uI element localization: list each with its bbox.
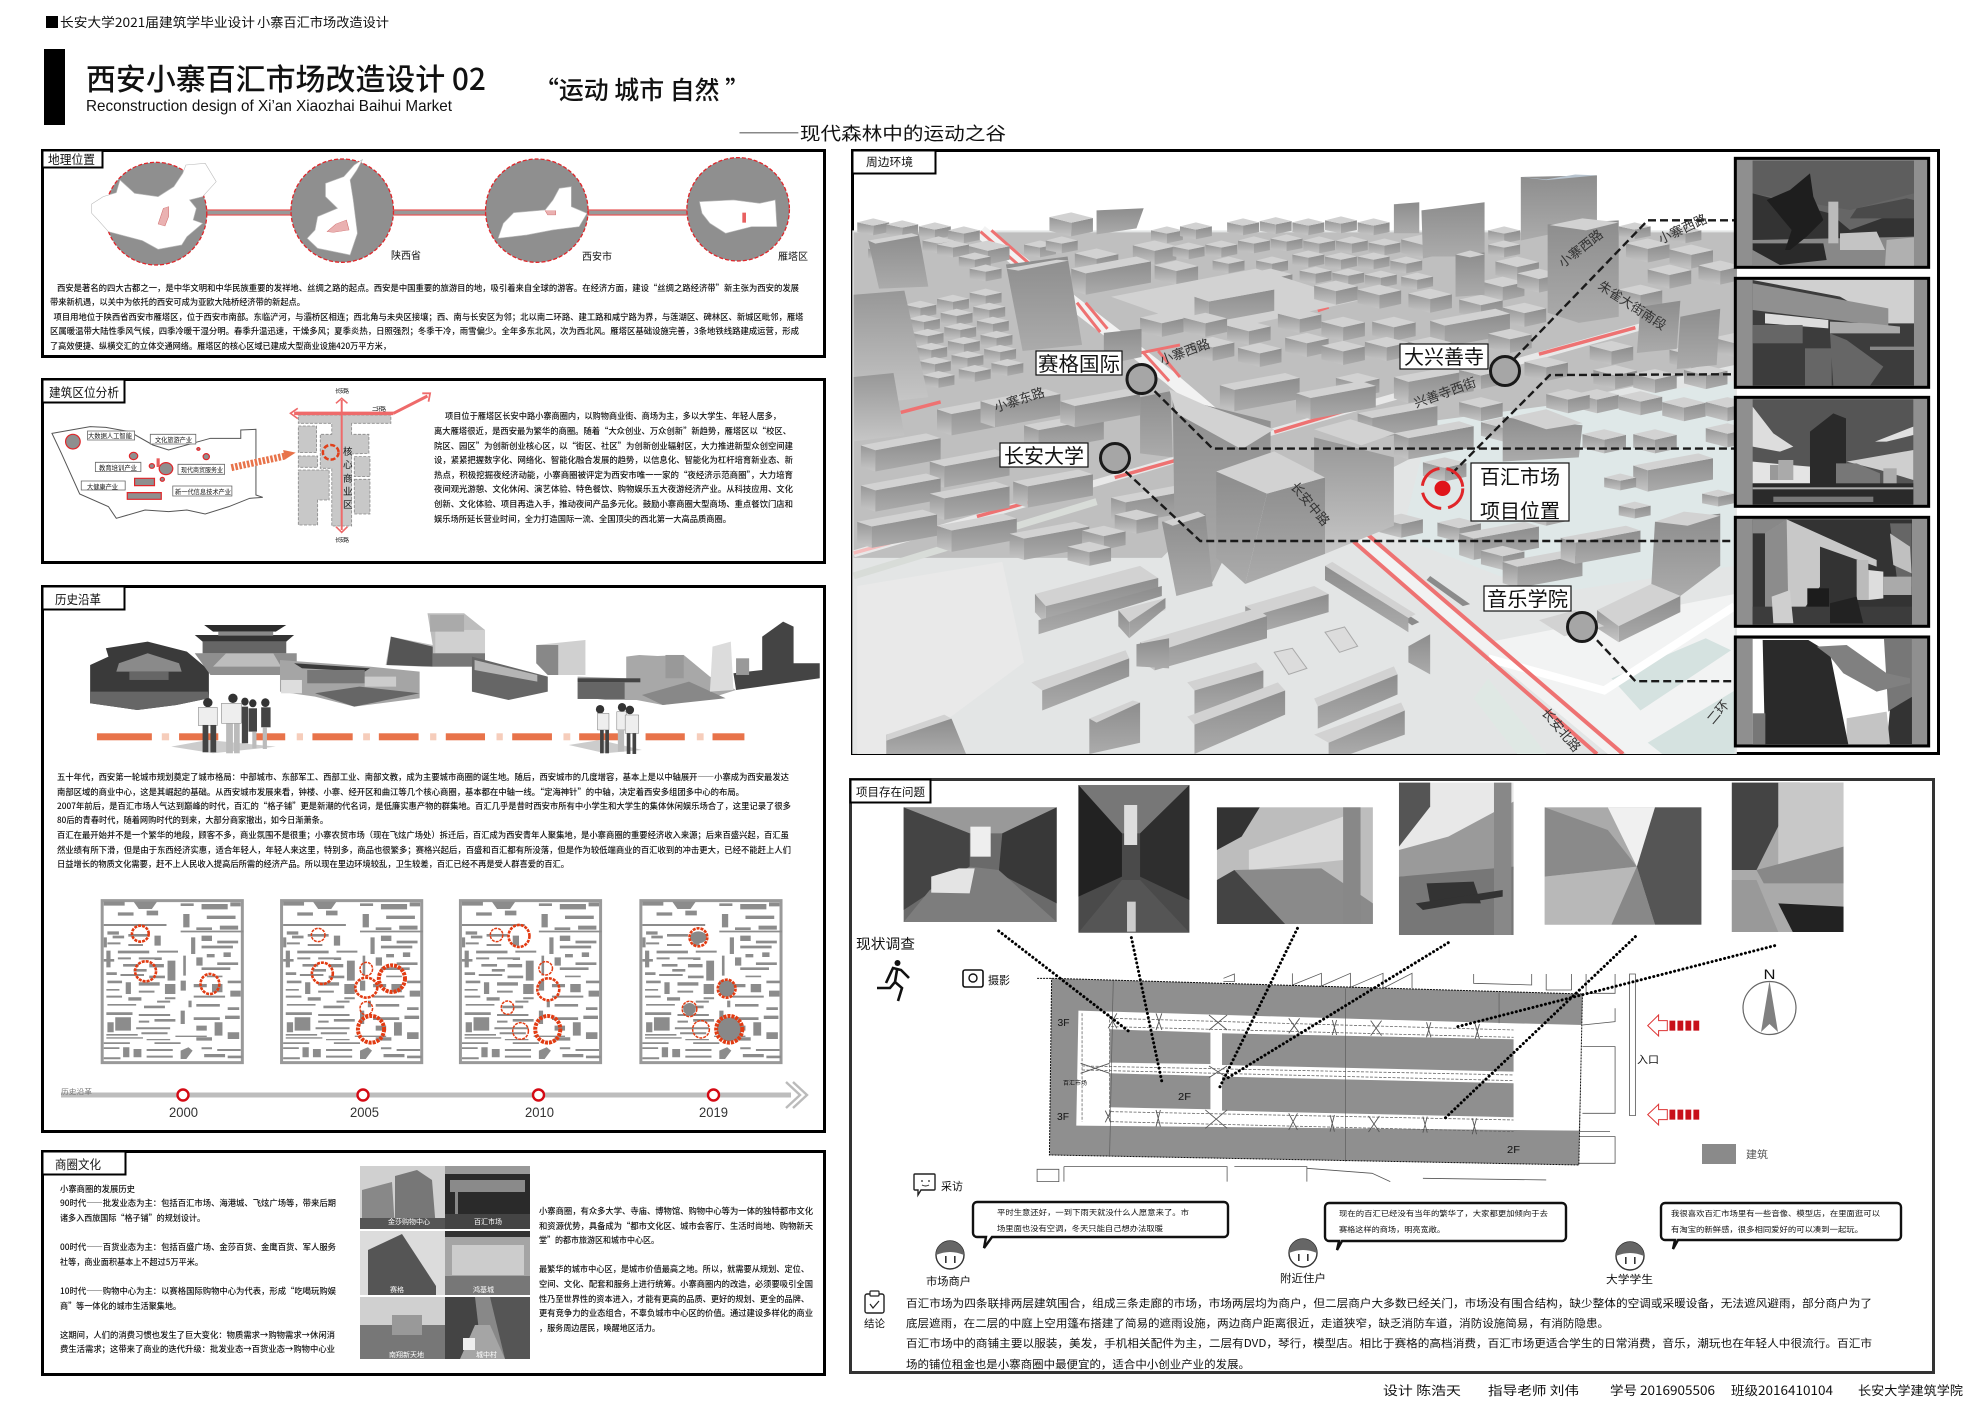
text: commercial analysis: 小寨商圈，有众多大学、寺庙、博物馆、购物中心等为一体的独特都市文化: [539, 1205, 814, 1217]
text: location description: 区属暖温带大陆性季风气候，四季冷暖干湿分明。春季升温迅速，干燥多风；夏季炎热，日照强烈；冬季干冷，雨雪偏少。全年多东北风，次为西北风。雁塔区基础设施完善，3条地铁线路建成运营，形成: [50, 325, 800, 337]
text: development history: [60, 1183, 337, 1355]
diagram: Yanta district industries: 新一代信息技术产业: [175, 486, 231, 496]
text: location description: 了高效便捷、纵横交汇的立体交通网络。雁塔区的核心区域已建成大型商业设施420万平方米，: [50, 340, 391, 352]
people figures: [171, 694, 642, 754]
text: conclusion: [906, 1295, 1872, 1372]
photo collage: history of the city: [90, 613, 820, 710]
footer credits: 长安大学建筑学院: [1858, 1380, 1964, 1399]
map captions: 西安市: [582, 248, 612, 263]
panel: surroundings: [852, 150, 1939, 755]
small block field: [857, 212, 1756, 588]
panel: geographic location: [42, 149, 824, 356]
diagram: Yanta district industries: [52, 427, 263, 518]
diagram: Yanta district industries: 文化旅游产业: [155, 434, 192, 444]
footer credits: 设计 陈浩天: [1383, 1380, 1462, 1399]
diagram: core commercial area: [290, 387, 430, 544]
street names: 小寨西路: [1554, 224, 1606, 271]
long slab blocks: [886, 562, 1430, 754]
label: problems: 项目存在问题: [856, 784, 925, 800]
diagram: Yanta district industries: 现代商贸服务业: [181, 464, 223, 474]
legend: building: 建筑: [1746, 1147, 1769, 1162]
header: school and project line: [46, 12, 389, 31]
speech bubble: student: 我很喜欢百汇市场里有一些音像、模型店，在里面逛可以: [1671, 1208, 1881, 1219]
diagram: core commercial area: 心: [343, 457, 353, 471]
diagram: core commercial area: 区: [343, 497, 353, 511]
speech bubble: student: [1661, 1203, 1901, 1249]
diagram: Yanta district industries: 大数据人工智能: [88, 430, 132, 440]
footer credits: 班级2016410104: [1731, 1380, 1833, 1399]
text: development history: 社等，商业面积基本上不超过5万平米。: [60, 1256, 203, 1268]
arrow: map to core area: [231, 450, 296, 468]
footer credits: [1383, 1380, 1964, 1399]
photo: SEG tower and skyline: [1735, 397, 1929, 506]
text: history description: 南部区域的商业中心，这是其崛起的基础。从西安城市发展来看，钟楼、小寨、经开区和曲江等几个核心商圈，基本都在中轴一线。“定海神针”的中轴，决定着西安多组团多中心的布局。: [57, 786, 744, 798]
timeline: years: [61, 1082, 807, 1120]
entrance arrows: [1637, 1015, 1699, 1125]
text: conclusion: 百汇市场中的商铺主要以服装，美发，手机相关配件为主，二层有DVD，琴行，模型店。相比于赛格的高档消费，百汇市场更适合学生的日常消费，音乐，潮玩也在年轻人中很流行。百汇市: [906, 1335, 1872, 1351]
text: commercial analysis: ，服务周边居民，唤醒地区活力。: [539, 1322, 660, 1334]
text: commercial analysis: [539, 1205, 814, 1334]
photo: conservatory gate: [1735, 517, 1929, 626]
site plan: [1037, 973, 1635, 1182]
interview legend: 采访: [941, 1178, 963, 1194]
text: site analysis description: 夜间观光游憩、文化休闲、演艺体验、特色餐饮、购物娱乐五大夜游经济产业。从科技应用、文化: [434, 483, 794, 495]
street names: 小寨东路: [991, 382, 1047, 416]
panel: history: [42, 586, 824, 1132]
text: site analysis description: 院区、园区”为创新创业核心区，以“街区、社区”为创新创业辐射区，大力推进新型众创空间建: [434, 440, 794, 452]
title block: Reconstruction design of Xi’an Xiaozhai Baihui Market: [86, 98, 453, 115]
diagram: Yanta district industries: 大健康产业: [87, 481, 118, 491]
photos: six district scenes: 城中村: [476, 1350, 497, 1360]
towers: [854, 175, 1720, 642]
legend: building: [1702, 1144, 1769, 1164]
diagram: core commercial area: 长安路: [335, 536, 349, 544]
text: history description: 日益增长的物质文化需要，赶不上人民收入提高后所需的经济产品。所以现在里边环境较乱，卫生较差，百汇已经不再是受人群喜爱的百汇。: [57, 858, 569, 870]
site plan: 2F: [1178, 1092, 1191, 1103]
photos: six district scenes: 鸿基城: [473, 1285, 494, 1295]
timeline band: orange dashes: [97, 733, 744, 740]
roads: [854, 230, 1735, 754]
interview legend: [914, 1174, 963, 1195]
speech bubble: merchant: [973, 1202, 1228, 1248]
3D city model: [852, 175, 1756, 754]
text: history description: 80后的青春时代，随着网购时代的到来，大部分商家撤出，如今日渐萧条。: [57, 814, 328, 826]
dashed leader lines: [1126, 220, 1735, 681]
callout: SEG International: 赛格国际: [1038, 348, 1120, 377]
avatar: merchant: [926, 1241, 971, 1289]
title block: [44, 49, 486, 125]
photos: six district scenes: 金莎购物中心: [388, 1217, 430, 1227]
avatar: student: [1606, 1242, 1653, 1287]
north compass: N: [1764, 966, 1776, 982]
label: problems: [850, 780, 930, 802]
text: development history: 这期间，人们的消费习惯也发生了巨大变化：物质需求→购物需求→休闲消: [60, 1329, 335, 1341]
text: conclusion: 百汇市场为四条联排两层建筑围合，组成三条走廊的市场，市场两层均为商户，但二层商户大多数已经关门，市场没有围合结构，缺少整体的空调或采暖设备，无法遮风避雨，部分商户为了: [906, 1295, 1872, 1311]
avatar: student: 大学学生: [1606, 1271, 1653, 1287]
street names: 小寨西路: [1655, 208, 1710, 248]
text: commercial analysis: 堂”的都市旅游区和城市中心区。: [539, 1234, 659, 1246]
avatar: merchant: 市场商户: [926, 1273, 971, 1289]
title block: 西安小寨百汇市场改造设计 02: [86, 55, 486, 99]
speech bubble: resident: [1325, 1203, 1566, 1250]
courts: [1274, 627, 1358, 674]
slogan: ———现代森林中的运动之谷: [738, 120, 1006, 146]
avatar: resident: [1280, 1239, 1326, 1286]
text: location description: [50, 282, 804, 352]
ground: [852, 230, 1737, 754]
panel: site location analysis: [42, 380, 824, 562]
timeline: years: 历史沿革: [61, 1087, 92, 1097]
site plan: 3F: [1057, 1112, 1069, 1123]
speech bubble: merchant: 平时生意还好，一到下雨天就没什么人愿意来了。市: [997, 1207, 1190, 1218]
street names: 长安中路: [1287, 477, 1335, 529]
photos: six district scenes: 南翔新天地: [389, 1350, 424, 1360]
text: commercial analysis: 和资源优势，具备成为“都市文化区、城市会客厅、生活时尚地、购物新天: [539, 1220, 814, 1232]
panel: commercial district culture: [42, 1152, 824, 1374]
text: commercial analysis: 最繁华的城市中心区，是城市价值最高之地。所以，就需要从规划、定位、: [539, 1263, 809, 1275]
text: development history: 小寨商圈的发展历史: [60, 1183, 136, 1195]
text: development history: 费生活需求；这带来了商业的迭代升级：批发业态→百货业态→购物中心业: [60, 1343, 335, 1355]
map captions: [391, 247, 808, 263]
callout: Conservatory of Music: 音乐学院: [1487, 583, 1568, 612]
timeline: years: 2010: [525, 1104, 554, 1120]
site plan: 3F: [1058, 1018, 1070, 1029]
street names: 兴善寺西街: [1411, 372, 1478, 412]
text: history description: 五十年代，西安第一轮城市规划奠定了城市格局：中部城市、东部军工、西部工业、南部文教，成为主要城市商圈的诞生地。随后，西安城市的几度增容，基本上是以中轴展开——小寨成为西安最发达: [57, 771, 790, 783]
label: history: [42, 586, 124, 610]
text: development history: 90时代——批发业态为主：包括百汇市场、海港城、飞炫广场等，带来后期: [60, 1197, 336, 1209]
map captions: 陕西省: [391, 247, 421, 262]
footer credits: 学号 2016905506: [1610, 1380, 1715, 1399]
text: history description: 2007年前后，是百汇市场人气达到巅峰的时代，百汇的“格子铺”更是新潮的代名词，是低廉实惠产物的群集地。百汇几乎是昔时西安市所有中小学生和大学生的集体休闲娱乐场合了，这里记录了很多: [57, 800, 791, 812]
street names: 长安北路: [1538, 703, 1586, 755]
location markers: [1100, 356, 1596, 642]
text: development history: 10时代——购物中心为主：以赛格国际购物中心为代表，形成“吃喝玩购娱: [60, 1285, 337, 1297]
diagram: core commercial area: 商: [343, 471, 353, 485]
survey heading and runner icon: 现状调查: [856, 934, 915, 954]
text: location description: 带来新机遇，以关中为依托的西安可成为亚欧大陆桥经济带的新起点。: [50, 296, 305, 308]
label: location: 地理位置: [48, 149, 95, 168]
text: site analysis description: 热点，积极挖掘夜经济动能，小寨商圈被评定为西安市唯一一家的“夜经济示范商圈”，大力培育: [434, 469, 793, 481]
text: commercial analysis: 更有竞争力的业态组合，不辜负城市中心区的价值。通过建设多样化的商业: [539, 1307, 813, 1319]
text: history description: 然业绩有所下滑，但是由于东西经济实惠，适合年轻人，年轻人来这里，特别多，商品也很繁多；赛格兴起后，百盛和百汇都有所没落，但是作为较低端商业的百汇收到的冲击更大，已经不能赶上人们: [57, 844, 791, 856]
text: site analysis description: [434, 410, 794, 525]
photo: conservatory stone: [1735, 637, 1929, 746]
photo: Baihui market entrance: [1735, 278, 1929, 387]
callout: project site: 百汇市场: [1480, 461, 1560, 490]
text: development history: 00时代——百货业态为主：包括百盛广场、金莎百货、金鹰百货、军人服务: [60, 1241, 337, 1253]
timeline: years: 2000: [169, 1104, 198, 1120]
text: development history: 商”等一体化的城市生活聚集地。: [60, 1300, 181, 1312]
callout: project site: 项目位置: [1480, 495, 1560, 524]
conclusion icon: [864, 1291, 885, 1331]
label: surroundings: [852, 150, 936, 174]
label: commercial culture: [42, 1152, 126, 1174]
timeline: years: 2005: [350, 1104, 379, 1120]
text: commercial analysis: 空间、文化、配套和服务上进行统筹。小寨商圈内的改造，必须要吸引全国: [539, 1278, 813, 1290]
photos: six district scenes: [360, 1166, 530, 1360]
diagram: core commercial area: 业: [343, 484, 353, 498]
text: conclusion: 底层遮雨，在二层的中庭上空用篷布搭建了简易的遮雨设施，两边商户距离很近，走道狭窄，缺乏消防车道，消防设施简易，有消防隐患。: [906, 1315, 1609, 1331]
text: history description: [57, 771, 791, 870]
slogan: [534, 71, 1006, 146]
speech bubble: resident: 赛格这样的商场，明亮宽敞。: [1339, 1224, 1445, 1235]
callout: Daxingshan Temple: 大兴善寺: [1404, 341, 1484, 370]
site plan: 百汇市场: [1063, 1078, 1087, 1087]
photography legend: [963, 970, 1010, 988]
text: history description: 百汇在最开始并不是一个繁华的地段，顾客不多，商业氛围不是很重；小寨农贸市场（现在飞炫广场处）拆迁后，百汇成为西安青年人聚集地，是小寨商圈的重要经济收入来源；后来百盛兴起，百汇虽: [57, 829, 789, 841]
text: site analysis description: 设，紧紧把握数字化、网络化、智能化融合发展的趋势，以信息化、智能化为杠杆培育新业态、新: [434, 454, 794, 466]
text: site analysis description: 娱乐场所延长营业时间，全力打造国际一流、全国顶尖的西北第一大高品质商圈。: [434, 513, 731, 525]
photography legend: 摄影: [988, 972, 1010, 988]
label: commercial culture: 商圈文化: [55, 1154, 101, 1173]
text: site analysis description: 项目位于雁塔区长安中路小寨商圈内，以购物商业街、商场为主，多以大学生、年轻人居多，: [445, 410, 781, 422]
header: school and project line: 小寨百汇市场改造设计: [257, 12, 389, 31]
text: location description: 西安是著名的四大古都之一，是中华文明和中华民族重要的发祥地、丝绸之路的起点。西安是中国重要的旅游目的地，吸引着来自全球的游客。在经济方面，建设“丝绸之路经济带”新主张为西安的发展: [57, 282, 800, 294]
diagram: Yanta district industries: 教育培训产业: [99, 462, 137, 472]
label: site analysis: 建筑区位分析: [49, 382, 119, 401]
speech bubble: student: 有淘宝的新鲜感，很多相同爱好的可以凑到一起玩。: [1671, 1224, 1863, 1235]
survey heading and runner icon: [856, 934, 915, 1001]
site plan: 2F: [1507, 1145, 1520, 1156]
text: site analysis description: 创新、文化体验、项目再造入手，推动夜间产品多元化。鼓励小寨商圈大型商场、重点餐饮门店和: [434, 498, 793, 510]
street names: 二环: [1702, 695, 1733, 728]
speech bubble: merchant: 场里面也没有空调，冬天只能自己想办法取暖: [997, 1223, 1164, 1234]
timeline: years: 2019: [699, 1104, 728, 1120]
site photos: [904, 783, 1844, 935]
callout: project site: [1471, 461, 1569, 524]
speech bubble: resident: 现在的百汇已经没有当年的繁华了，大家都更加倾向于去: [1339, 1208, 1549, 1219]
text: commercial analysis: 性乃至世界性的资本进入，才能有更高的品质、更好的规划、更全的品牌、: [539, 1293, 809, 1305]
text: site analysis description: 离大雁塔很近，是西安最为繁华的商圈。随着“大众创业、万众创新”新趋势，雁塔区以“校区、: [434, 425, 791, 437]
text: conclusion: 场的铺位租金也是小寨商圈中最便宜的，适合中小创业产业的发展。: [906, 1356, 1250, 1372]
photos: six district scenes: 百汇市场: [474, 1217, 502, 1227]
site marker: [1422, 468, 1463, 508]
entrance arrows: 入口: [1637, 1052, 1659, 1067]
label: history: 历史沿革: [55, 589, 101, 608]
callout: Chang'an University: 长安大学: [1004, 440, 1084, 469]
north compass: [1743, 966, 1796, 1034]
photo: temple: [1735, 158, 1929, 267]
text: development history: 诸多入西旅国际“格子铺”的规划设计。: [60, 1212, 205, 1224]
text: location description: 项目用地位于陕西省西安市雁塔区，位于西安市南部。东临浐河，与灞桥区相连；西北角与未央区接壤；西、南与长安区为邻；北以南二环路、建工路和咸宁路为界，与莲湖区、碑林区、新城区毗邻，雁塔: [54, 311, 804, 323]
photos: six district scenes: 赛格: [390, 1285, 404, 1295]
street names: [991, 208, 1733, 755]
panel: current problems: [850, 780, 1934, 1372]
diagram: core commercial area: 二环路: [372, 405, 386, 413]
maps: commercial evolution 2000 to 2019: [102, 901, 782, 1063]
slogan: “运动 城市 自然 ”: [534, 71, 750, 107]
dotted view lines: [999, 928, 1775, 1120]
footer credits: 指导老师 刘伟: [1488, 1380, 1579, 1399]
diagram: core commercial area: 核: [343, 444, 353, 458]
diagram: core commercial area: 长安路: [335, 387, 349, 395]
label: surroundings: 周边环境: [866, 154, 913, 170]
conclusion icon: 结论: [864, 1316, 885, 1331]
avatar: resident: 附近住户: [1280, 1270, 1326, 1286]
map captions: 雁塔区: [778, 248, 808, 263]
street names: 朱雀大街南段: [1595, 275, 1671, 334]
street names: 小寨西路: [1157, 333, 1212, 369]
header: school and project line: 长安大学2021届建筑学毕业设计: [60, 12, 255, 31]
